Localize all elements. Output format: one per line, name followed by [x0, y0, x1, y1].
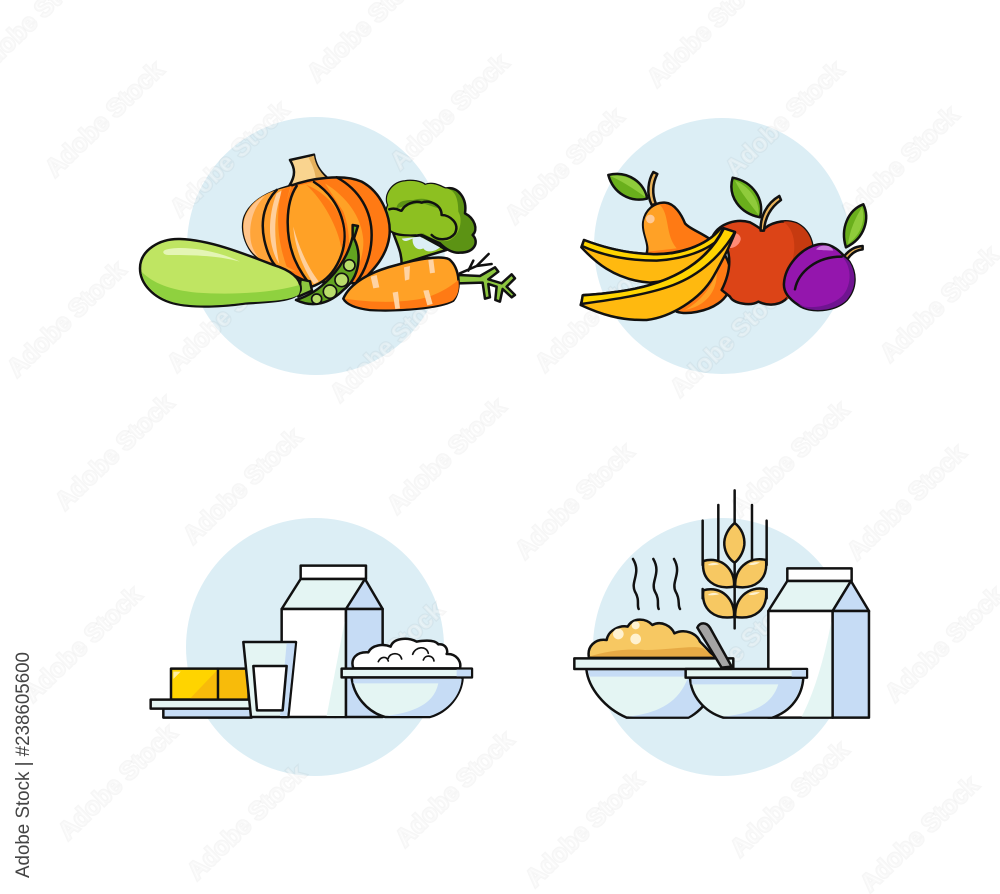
watermark: repeated Adobe Stock text: Adobe Stock [50, 389, 179, 515]
background circle: fruits [594, 118, 850, 374]
watermark: repeated Adobe Stock text: Adobe Stock [725, 736, 854, 862]
watermark: repeated Adobe Stock text: Adobe Stock [725, 396, 854, 522]
icon: apple [713, 178, 813, 305]
watermark: repeated Adobe Stock text: Adobe Stock [178, 423, 307, 549]
icon: plum [784, 204, 866, 310]
watermark: repeated Adobe Stock text: Adobe Stock [320, 596, 449, 722]
watermark: repeated Adobe Stock text: Adobe Stock [40, 56, 169, 182]
icon: spoon [697, 623, 732, 668]
icon: steam lines [633, 559, 680, 609]
stock id caption: Adobe Stock | #238605600 [13, 652, 34, 878]
watermark: repeated Adobe Stock text: Adobe Stock [385, 49, 514, 175]
fruits group [581, 172, 866, 320]
icon: milk carton [282, 566, 383, 717]
dairy group [151, 566, 472, 718]
watermark: repeated Adobe Stock text: Adobe Stock [842, 439, 971, 565]
watermark: repeated Adobe Stock text: Adobe Stock [855, 771, 984, 894]
icon: porridge [589, 620, 714, 658]
watermark: repeated Adobe Stock text: Adobe Stock [2, 256, 131, 382]
watermark: repeated Adobe Stock text: Adobe Stock [182, 759, 311, 885]
background circle: grains [593, 518, 851, 776]
icon: carrot tops [458, 254, 515, 302]
icon: small bowl [686, 669, 807, 718]
icon: broccoli [387, 181, 476, 264]
icon: milk carton [768, 568, 869, 718]
icon: bananas [581, 228, 735, 320]
vegetables group [140, 155, 515, 310]
watermark: repeated Adobe Stock text: Adobe Stock [53, 719, 182, 845]
watermark: repeated Adobe Stock text: Adobe Stock [510, 438, 639, 564]
background circle: vegetables [187, 117, 445, 375]
watermark: repeated Adobe Stock text: Adobe Stock [165, 96, 294, 222]
watermark: repeated Adobe Stock text: Adobe Stock [382, 393, 511, 519]
watermark: repeated Adobe Stock text: Adobe Stock [18, 581, 147, 707]
icon: zucchini [140, 239, 312, 306]
icon: glass of milk [243, 642, 296, 717]
watermark: repeated Adobe Stock text: Adobe Stock [530, 251, 659, 377]
watermark: repeated Adobe Stock text: Adobe Stock [390, 726, 519, 852]
watermark: repeated Adobe Stock text: Adobe Stock [520, 766, 649, 892]
icon: pumpkin [243, 155, 390, 287]
background circle: dairy [186, 518, 444, 776]
icon: pear [608, 172, 731, 313]
watermark: repeated Adobe Stock text: Adobe Stock [720, 56, 849, 182]
icon: wheat ear [703, 490, 767, 628]
grains group [574, 490, 869, 718]
icon: pea pod [296, 225, 359, 304]
watermark: repeated Adobe Stock text: Adobe Stock [665, 276, 794, 402]
watermark: repeated Adobe Stock text: Adobe Stock [500, 103, 629, 229]
icon: large bowl [574, 658, 733, 718]
icon: butter dish [151, 669, 252, 718]
watermark: repeated Adobe Stock text: Adobe Stock [675, 586, 804, 712]
icon: carrot [343, 258, 459, 310]
watermark: repeated Adobe Stock text: Adobe Stock [835, 101, 964, 227]
watermark: repeated Adobe Stock text: Adobe Stock [325, 281, 454, 407]
icon: bowl of cottage cheese [342, 639, 472, 717]
watermark: repeated Adobe Stock text: Adobe Stock [162, 251, 291, 377]
